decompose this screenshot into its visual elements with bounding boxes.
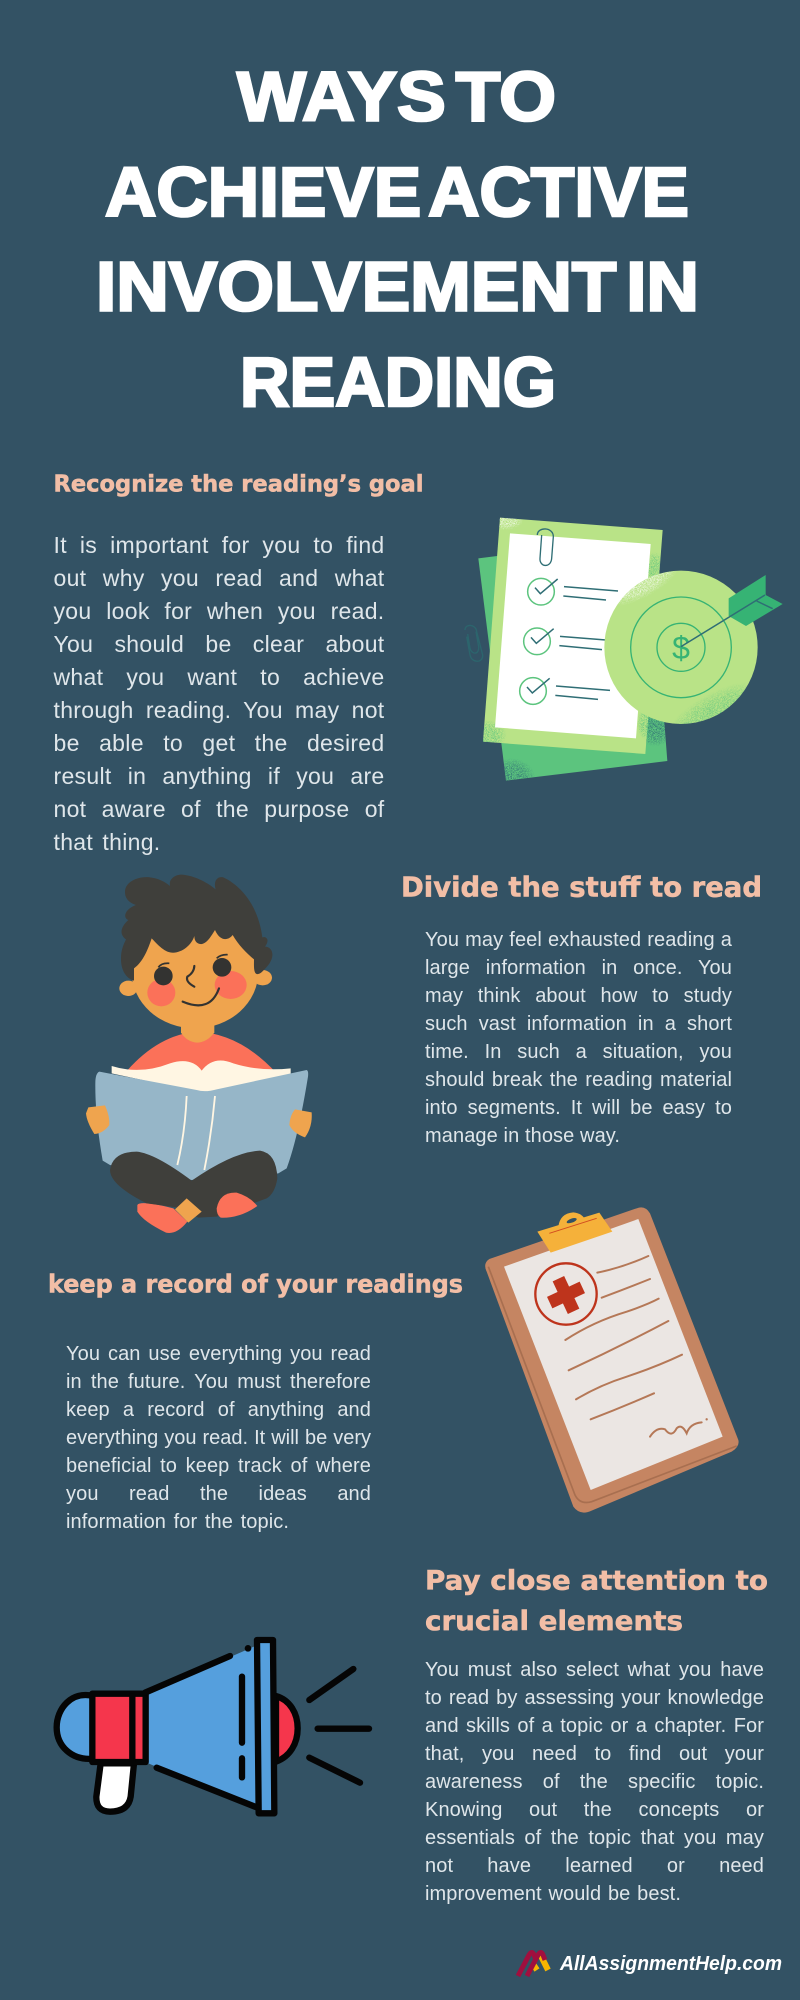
cheeks <box>147 979 175 1006</box>
title: INVOLVEMENT IN <box>96 248 699 326</box>
paragraph: pay close attention to crucial elements: essentials of the topic that you may <box>425 1827 764 1849</box>
logo <box>518 1952 782 1976</box>
paragraph: keep a record of your readings: in the future. You must therefore <box>66 1371 371 1393</box>
paragraph: keep a record of your readings: everything you read. It will be very <box>66 1427 371 1449</box>
heading: pay close attention to crucial elements: crucial elements <box>425 1606 683 1637</box>
illustration: clipboard <box>485 1207 739 1513</box>
nose and mouth <box>183 966 219 1005</box>
paragraph: pay close attention to crucial elements: that, you need to find out your <box>425 1743 764 1765</box>
paragraph: recognize the reading's goal: that thing. <box>54 829 160 855</box>
paragraph: recognize the reading's goal: You should be clear about <box>54 631 384 657</box>
paragraph: keep a record of your readings: You can use everything you read <box>66 1343 371 1365</box>
heading: pay close attention to crucial elements: Pay close attention to <box>425 1565 768 1596</box>
paragraph: pay close attention to crucial elements: improvement would be best. <box>425 1883 681 1905</box>
paragraph: keep a record of your readings: you read the ideas and <box>66 1483 371 1505</box>
paragraph: keep a record of your readings <box>66 1343 371 1533</box>
handle <box>96 1763 134 1812</box>
book pages <box>112 1060 291 1093</box>
medical cross stamp <box>535 1263 597 1325</box>
back green sheet <box>478 537 667 781</box>
paper <box>504 1219 723 1490</box>
paragraph: divide the stuff to read: should break the reading material <box>425 1068 732 1090</box>
white page <box>495 533 651 738</box>
paragraph: recognize the reading's goal: what you want to achieve <box>54 664 384 690</box>
heading: pay close attention to crucial elements <box>425 1565 768 1637</box>
paragraph: pay close attention to crucial elements: and skills of a topic or a chapter. For <box>425 1715 764 1737</box>
illustration: checklist and target: $ <box>672 630 690 666</box>
board <box>485 1207 739 1513</box>
check items <box>520 578 618 704</box>
hair <box>121 875 272 981</box>
paragraph: pay close attention to crucial elements: not have learned or need <box>425 1855 764 1877</box>
paragraph: divide the stuff to read: large information in once. You <box>425 956 732 978</box>
heading: keep a record of your readings: keep a record of your readings <box>48 1270 463 1299</box>
paperclip on page <box>537 529 553 565</box>
target <box>604 571 758 724</box>
spine lines <box>177 1096 215 1170</box>
paragraph: divide the stuff to read: may think about how to study <box>425 984 732 1006</box>
face <box>132 915 258 1028</box>
paragraph: keep a record of your readings: beneficial to keep track of where <box>66 1455 371 1477</box>
logo text: AllAssignmentHelp.com <box>559 1953 782 1975</box>
paragraph: recognize the reading's goal: through reading. You may not <box>54 697 384 723</box>
paragraph: divide the stuff to read: time. In such a situation, you <box>425 1040 732 1062</box>
back dome <box>57 1695 93 1759</box>
paragraph: recognize the reading's goal: not aware of the purpose of <box>54 796 384 822</box>
feet <box>137 1203 187 1233</box>
paragraph: pay close attention to crucial elements: to read by assessing your knowledge <box>425 1687 764 1709</box>
paragraph: divide the stuff to read: You may feel exhausted reading a <box>425 928 732 950</box>
front dome <box>276 1696 298 1762</box>
shirt <box>123 1032 277 1075</box>
neck <box>181 1017 214 1043</box>
paragraph: recognize the reading's goal: It is important for you to find <box>54 532 384 558</box>
illustration: checklist and target <box>465 510 783 795</box>
paragraph: pay close attention to crucial elements: Knowing out the concepts or <box>425 1799 764 1821</box>
title: READING <box>240 343 556 421</box>
paragraph: recognize the reading's goal: out why you read and what <box>54 565 384 591</box>
paragraph: keep a record of your readings: keep a record of anything and <box>66 1399 371 1421</box>
paragraph: divide the stuff to read <box>425 928 732 1146</box>
light green sheet <box>483 518 663 754</box>
handwriting lines <box>565 1256 702 1437</box>
paragraph: recognize the reading's goal: you look for when you read. <box>54 598 384 624</box>
loose paperclip <box>465 625 483 661</box>
illustration: boy reading a book <box>86 875 312 1233</box>
red band <box>92 1694 146 1762</box>
clip <box>558 1212 586 1227</box>
paragraph: pay close attention to crucial elements <box>425 1659 764 1905</box>
logo mark <box>518 1952 548 1976</box>
paragraph: divide the stuff to read: such vast information in a short <box>425 1012 732 1034</box>
title <box>96 58 699 421</box>
paragraph: pay close attention to crucial elements: awareness of the specific topic. <box>425 1771 764 1793</box>
title: ACHIEVE ACTIVE <box>105 153 689 231</box>
paragraph: divide the stuff to read: into segments. It will be easy to <box>425 1096 732 1118</box>
paragraph: keep a record of your readings: information for the topic. <box>66 1511 289 1533</box>
paragraph: pay close attention to crucial elements: You must also select what you have <box>425 1659 764 1681</box>
ears <box>119 981 137 996</box>
paragraph: divide the stuff to read: manage in those way. <box>425 1124 620 1146</box>
arrow <box>729 575 783 626</box>
paragraph: recognize the reading's goal: be able to get the desired <box>54 730 384 756</box>
bell rim <box>257 1640 274 1813</box>
eyes <box>154 967 173 985</box>
outline strokes and sound rays <box>145 1656 369 1807</box>
heading: divide the stuff to read: Divide the stuff to read <box>401 871 762 904</box>
illustration: megaphone <box>57 1640 369 1813</box>
horn body <box>147 1644 260 1810</box>
legs <box>110 1151 277 1218</box>
book cover <box>95 1070 308 1180</box>
heading: recognize the reading's goal: Recognize the reading’s goal <box>54 472 424 498</box>
hands <box>86 1105 109 1134</box>
title: WAYS TO <box>237 58 556 136</box>
paragraph: recognize the reading's goal <box>54 532 384 855</box>
paragraph: recognize the reading's goal: result in anything if you are <box>54 763 384 789</box>
